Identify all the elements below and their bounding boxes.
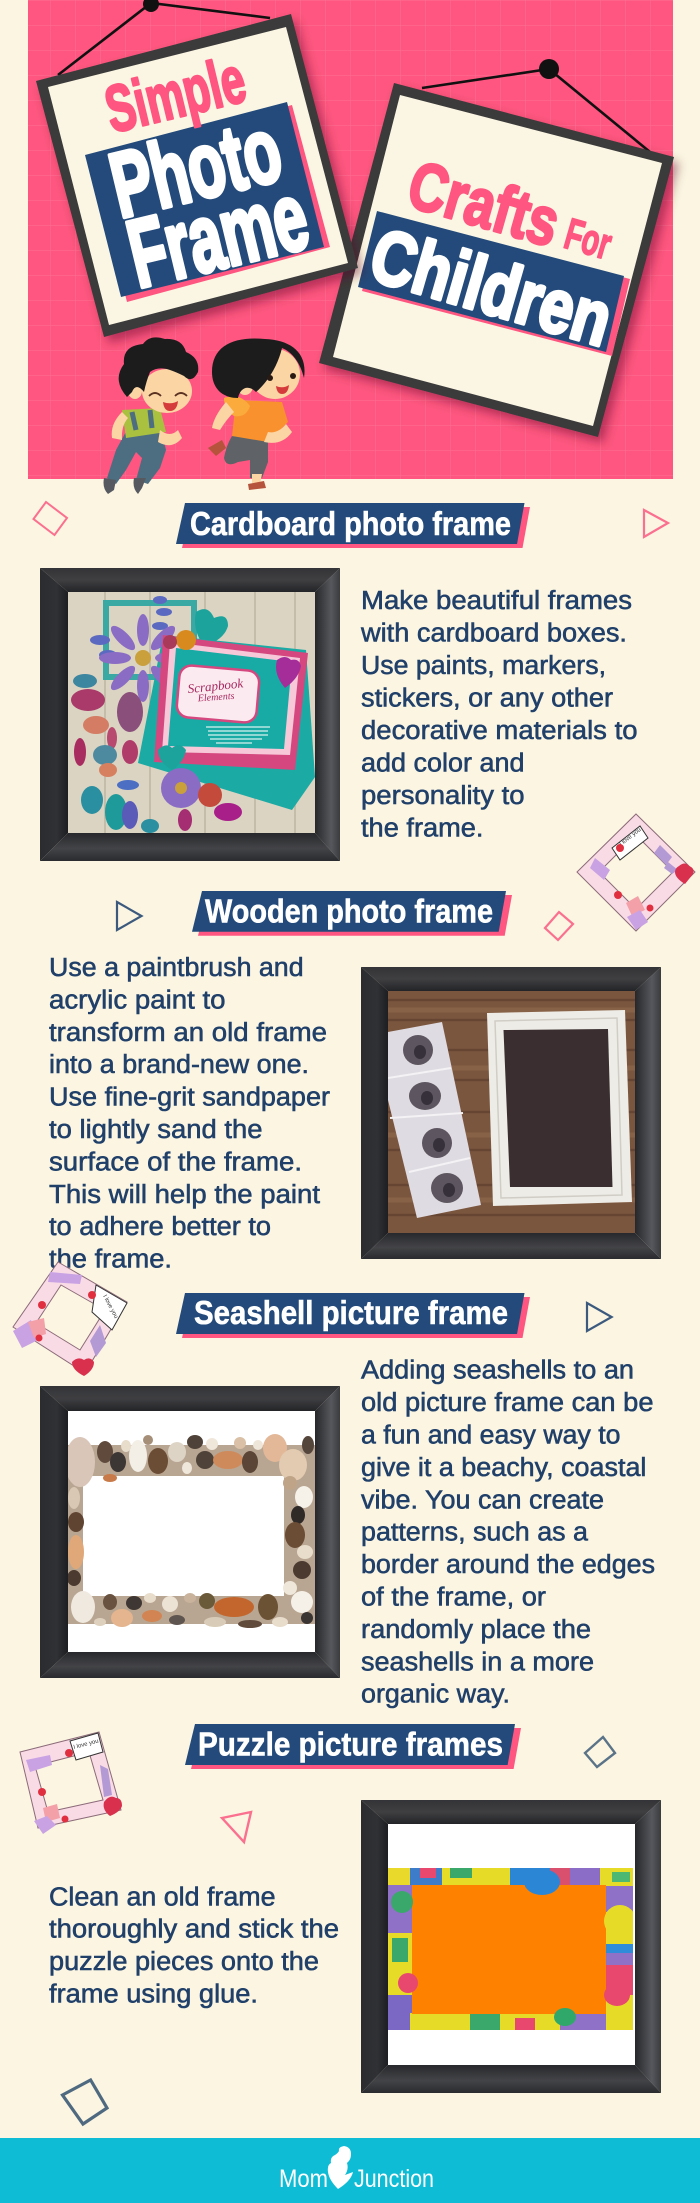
photo panel: cardboard frame: Elements xyxy=(196,691,235,704)
logo icon: mother and child heart xyxy=(328,2146,353,2189)
text: cardboard frame description: Make beautiful frames xyxy=(361,587,632,615)
text: seashell frame description: Adding seashells to an xyxy=(361,1357,634,1385)
text: wooden frame description: Use fine-grit sandpaper xyxy=(49,1084,331,1112)
text: wooden frame description: to adhere better to xyxy=(49,1213,271,1241)
text: seashell frame description: organic way. xyxy=(361,1681,510,1709)
decoration: love photo frame sticker, lower left xyxy=(20,1732,122,1834)
text: cardboard frame description: stickers, or any other xyxy=(361,684,614,712)
text: seashell frame description: randomly place the xyxy=(361,1616,591,1644)
right hero frame: Crafts For Children xyxy=(319,83,674,437)
text: wooden frame description: the frame. xyxy=(49,1246,172,1274)
decoration: pink triangle xyxy=(222,1812,251,1842)
text: cardboard frame description: with cardboard boxes. xyxy=(360,620,627,648)
left hero frame: Simple Photo Frame xyxy=(36,14,358,337)
text: puzzle frame description xyxy=(49,1883,339,2008)
text: seashell frame description: of the frame, or xyxy=(361,1584,547,1612)
heading: wooden photo frame: Wooden photo frame xyxy=(205,893,493,930)
text: puzzle frame description: thoroughly and stick the xyxy=(49,1916,339,1944)
decoration: love photo frame sticker, right xyxy=(577,814,695,931)
left hero frame: Simple Photo Frame: Photo xyxy=(101,98,291,237)
text: seashell frame description: old picture frame can be xyxy=(361,1389,654,1417)
photo panel: wooden frame xyxy=(361,967,661,1259)
text: wooden frame description: transform an old frame xyxy=(49,1019,327,1047)
text: seashell frame description: patterns, such as a xyxy=(361,1519,589,1547)
decoration: slate diamond xyxy=(62,2080,107,2124)
photo panel: cardboard frame: Scrapbook xyxy=(187,675,244,696)
heading: puzzle picture frames: Puzzle picture frames xyxy=(198,1726,503,1763)
decoration: pink diamond xyxy=(545,912,573,940)
footer logo: MomJunction: Junction xyxy=(354,2165,434,2193)
text: seashell frame description: vibe. You can create xyxy=(361,1486,604,1514)
text: wooden frame description: acrylic paint to xyxy=(49,986,226,1014)
footer logo: MomJunction xyxy=(279,2146,434,2193)
decoration: pink diamond xyxy=(34,502,67,535)
illustration: running girl xyxy=(208,338,305,490)
decoration: love photo frame sticker, left: I love you xyxy=(101,1294,119,1320)
text: seashell frame description: a fun and easy way to xyxy=(361,1422,620,1450)
decoration: pink triangle xyxy=(644,510,668,537)
footer logo: MomJunction: Mom xyxy=(279,2165,328,2193)
text: puzzle frame description: puzzle pieces onto the xyxy=(49,1948,319,1976)
text: wooden frame description: into a brand-new one. xyxy=(49,1051,309,1079)
right hero frame: Crafts For Children: Children xyxy=(361,213,621,363)
text: seashell frame description xyxy=(361,1357,655,1709)
left hero frame: Simple Photo Frame: Simple xyxy=(98,42,252,147)
text: wooden frame description: This will help the paint xyxy=(49,1181,320,1209)
decoration: love photo frame sticker, right: I love you xyxy=(619,827,642,848)
text: seashell frame description: seashells in a more xyxy=(361,1648,594,1676)
heading: seashell picture frame: Seashell picture frame xyxy=(194,1294,508,1331)
left hero frame: Simple Photo Frame: Frame xyxy=(118,162,318,308)
text: seashell frame description: give it a beachy, coastal xyxy=(361,1454,646,1482)
hero panel xyxy=(28,0,673,479)
decoration: slate diamond xyxy=(585,1737,615,1767)
right hero frame: Crafts For Children: For xyxy=(559,210,617,269)
text: cardboard frame description: personality to xyxy=(361,782,524,810)
decoration: navy triangle xyxy=(117,902,142,930)
text: wooden frame description xyxy=(49,954,331,1274)
text: cardboard frame description xyxy=(360,587,638,842)
text: wooden frame description: to lightly sand the xyxy=(49,1116,262,1144)
heading: cardboard photo frame: Cardboard photo frame xyxy=(190,505,511,542)
text: cardboard frame description: Use paints, markers, xyxy=(361,652,606,680)
photo panel: cardboard frame xyxy=(40,568,340,861)
right hero frame: Crafts For Children: Crafts xyxy=(400,146,568,262)
photo panel: puzzle frame xyxy=(361,1800,661,2093)
decoration: love photo frame sticker, lower left: I love you xyxy=(73,1738,99,1751)
text: wooden frame description: surface of the frame. xyxy=(49,1148,302,1176)
text: cardboard frame description: the frame. xyxy=(361,814,484,842)
text: puzzle frame description: Clean an old frame xyxy=(49,1883,276,1911)
text: seashell frame description: border around the edges xyxy=(361,1551,655,1579)
footer bar xyxy=(0,2138,700,2203)
decoration: love photo frame sticker, left xyxy=(13,1262,127,1376)
decoration: navy triangle xyxy=(587,1303,612,1331)
text: puzzle frame description: frame using glue. xyxy=(49,1980,258,2008)
illustration: running boy xyxy=(104,337,198,494)
photo panel: seashell frame xyxy=(40,1386,340,1678)
text: wooden frame description: Use a paintbrush and xyxy=(49,954,304,982)
hanging wires: right frame xyxy=(422,59,650,152)
text: cardboard frame description: add color and xyxy=(361,750,524,778)
hanging wires: left frame xyxy=(58,0,270,75)
text: cardboard frame description: decorative materials to xyxy=(361,717,638,745)
